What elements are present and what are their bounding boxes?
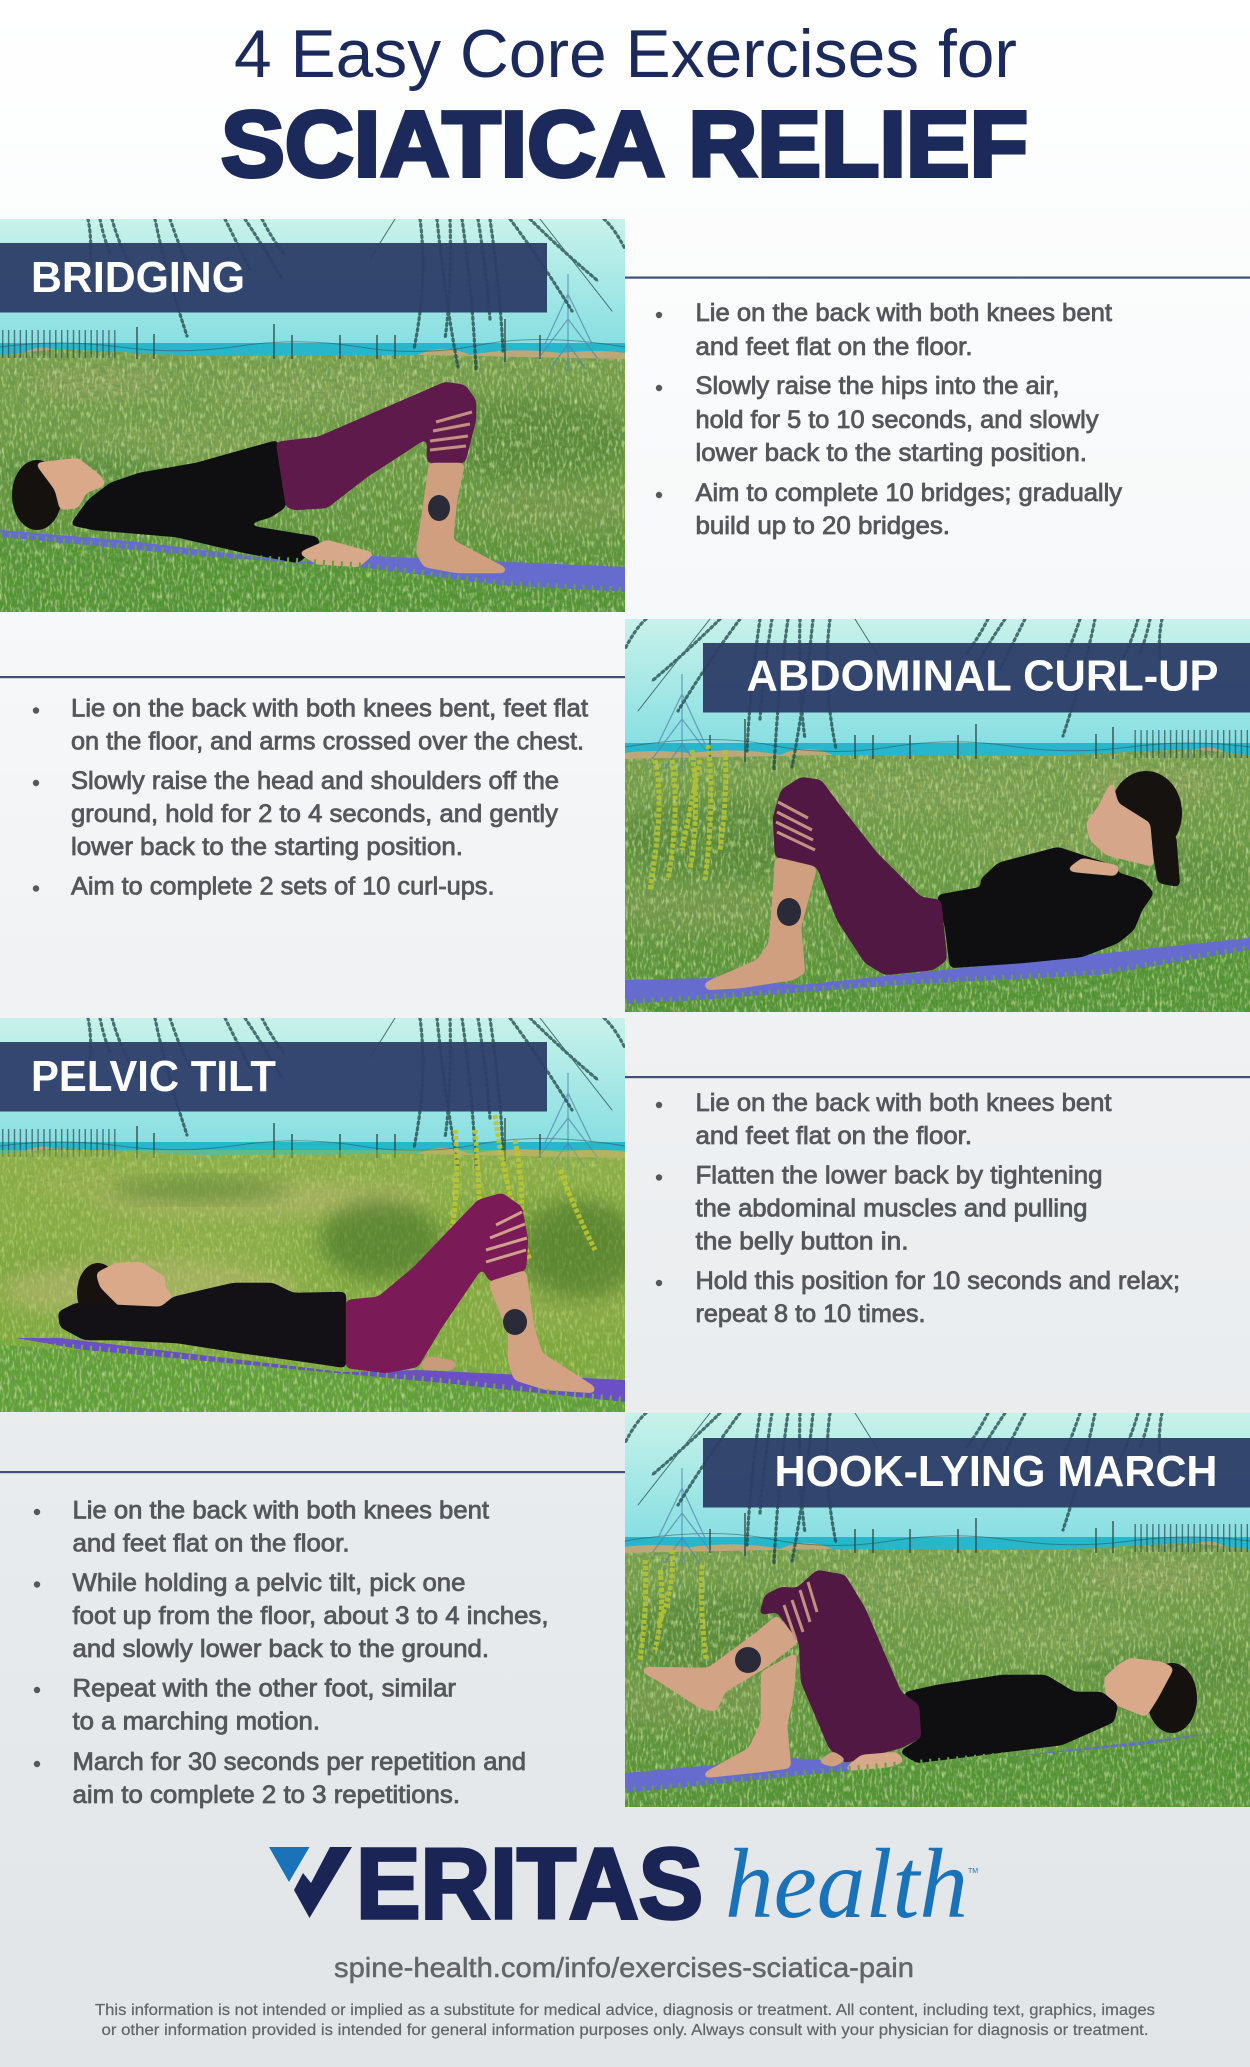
icon: logo mark [269,1847,352,1918]
text block: bridging instructions: Slowly raise the hips into the air, [696,372,1060,400]
text block: pelvic tilt instructions [656,1089,1180,1328]
text block: pelvic tilt instructions: Flatten the lower back by tightening [696,1162,1102,1190]
text block: hook-lying march instructions [34,1496,549,1809]
panel: hook-lying march photo [600,1413,1250,1807]
banner: hook-lying march [703,1438,1250,1508]
logo: Veritas Health: health [725,1828,968,1939]
text block: pelvic tilt instructions: the belly button in. [696,1228,908,1256]
text block: bridging instructions: lower back to the starting position. [696,439,1087,467]
text block: hook-lying march instructions: aim to complete 2 to 3 repetitions. [72,1781,460,1809]
banner: bridging: BRIDGING [31,253,245,302]
foreground grass [0,530,625,612]
text block: pelvic tilt instructions: Lie on the back with both knees bent [696,1089,1112,1117]
connector line: bridging [547,276,1250,279]
banner: bridging [0,243,547,312]
text block: bridging instructions: Lie on the back with both knees bent [696,299,1112,327]
yoga mat [0,530,625,592]
logo: Veritas Health: ERITAS [356,1828,703,1940]
text block: bridging instructions: Aim to complete 10 bridges; gradually [696,479,1123,507]
text block: curl-up instructions: ground, hold for 2 to 4 seconds, and gently [71,800,558,828]
text block: curl-up instructions: Lie on the back with both knees bent, feet flat [71,694,588,722]
banner: hook-lying march: HOOK-LYING MARCH [774,1447,1218,1496]
text block: hook-lying march instructions: and feet flat on the floor. [72,1530,350,1558]
text block: hook-lying march instructions: While holding a pelvic tilt, pick one [72,1569,466,1597]
text block: curl-up instructions: lower back to the starting position. [71,833,463,861]
text block: bridging instructions: build up to 20 bridges. [696,512,950,540]
text block: hook-lying march instructions: March for 30 seconds per repetition and [72,1748,526,1776]
text block: hook-lying march instructions: Lie on the back with both knees bent [72,1496,489,1524]
text block: hook-lying march instructions: foot up from the floor, about 3 to 4 inches, [72,1602,548,1630]
text block: curl-up instructions: Aim to complete 2 sets of 10 curl-ups. [71,872,494,900]
text block: bridging instructions: and feet flat on the floor. [696,333,972,361]
text block: curl-up instructions [33,694,588,900]
connector line: curl-up [0,676,703,678]
text block: bridging instructions: hold for 5 to 10 seconds, and slowly [696,406,1099,434]
foreground grass [625,1730,1250,1807]
title [221,16,1028,196]
woman in march [642,1570,1197,1778]
text block: hook-lying march instructions: Repeat with the other foot, similar [72,1674,456,1702]
foreground grass [625,945,1250,1012]
yellow willow [450,1115,595,1260]
text block: hook-lying march instructions: and slowly lower back to the ground. [72,1635,489,1663]
yoga mat [16,1338,625,1402]
panel: abdominal curl-up photo [600,619,1250,1012]
text block: pelvic tilt instructions: repeat 8 to 10 times. [696,1300,926,1328]
banner: pelvic tilt: PELVIC TILT [31,1052,276,1101]
panel: bridging photo [0,219,650,612]
title: 4 Easy Core Exercises for [234,16,1017,92]
banner: pelvic tilt [0,1042,547,1112]
text block: pelvic tilt instructions: the abdominal muscles and pulling [696,1194,1088,1222]
panel: pelvic tilt photo [0,1018,650,1412]
text block: curl-up instructions: Slowly raise the head and shoulders off the [71,767,559,795]
yoga mat [625,1733,1215,1793]
banner: abdominal curl-up: ABDOMINAL CURL-UP [746,652,1218,700]
text block: bridging instructions [656,299,1123,540]
disclaimer: or other information provided is intended for general information purposes only. Always consult with your physician for diagnosis or treatment. [102,2022,1148,2039]
text block: hook-lying march instructions: to a marching motion. [72,1708,320,1736]
yellow willow [640,1550,706,1660]
disclaimer [95,2002,1155,2039]
yoga mat [625,938,1250,1004]
sunlit grass tone [0,1150,625,1380]
logo: Veritas Health [269,1828,978,1940]
foreground grass [0,1340,625,1412]
disclaimer: This information is not intended or implied as a substitute for medical advice, diagnosis or treatment. All content, including text, graphics, images [95,2002,1155,2019]
banner: abdominal curl-up [703,643,1250,712]
logo: Veritas Health: TM [968,1868,978,1875]
woman in pelvic tilt [58,1193,595,1393]
woman in curl-up [704,771,1182,990]
connector line: hook-lying march [0,1471,703,1473]
woman in bridge pose [12,382,506,573]
source url: spine-health.com/info/exercises-sciatica-pain [334,1952,914,1983]
connector line: pelvic tilt [547,1076,1250,1078]
title: SCIATICA RELIEF [221,92,1028,196]
text block: pelvic tilt instructions: Hold this position for 10 seconds and relax; [696,1267,1180,1295]
text block: curl-up instructions: on the floor, and arms crossed over the chest. [71,728,584,756]
yellow willow [650,745,726,890]
text block: pelvic tilt instructions: and feet flat on the floor. [696,1122,972,1150]
